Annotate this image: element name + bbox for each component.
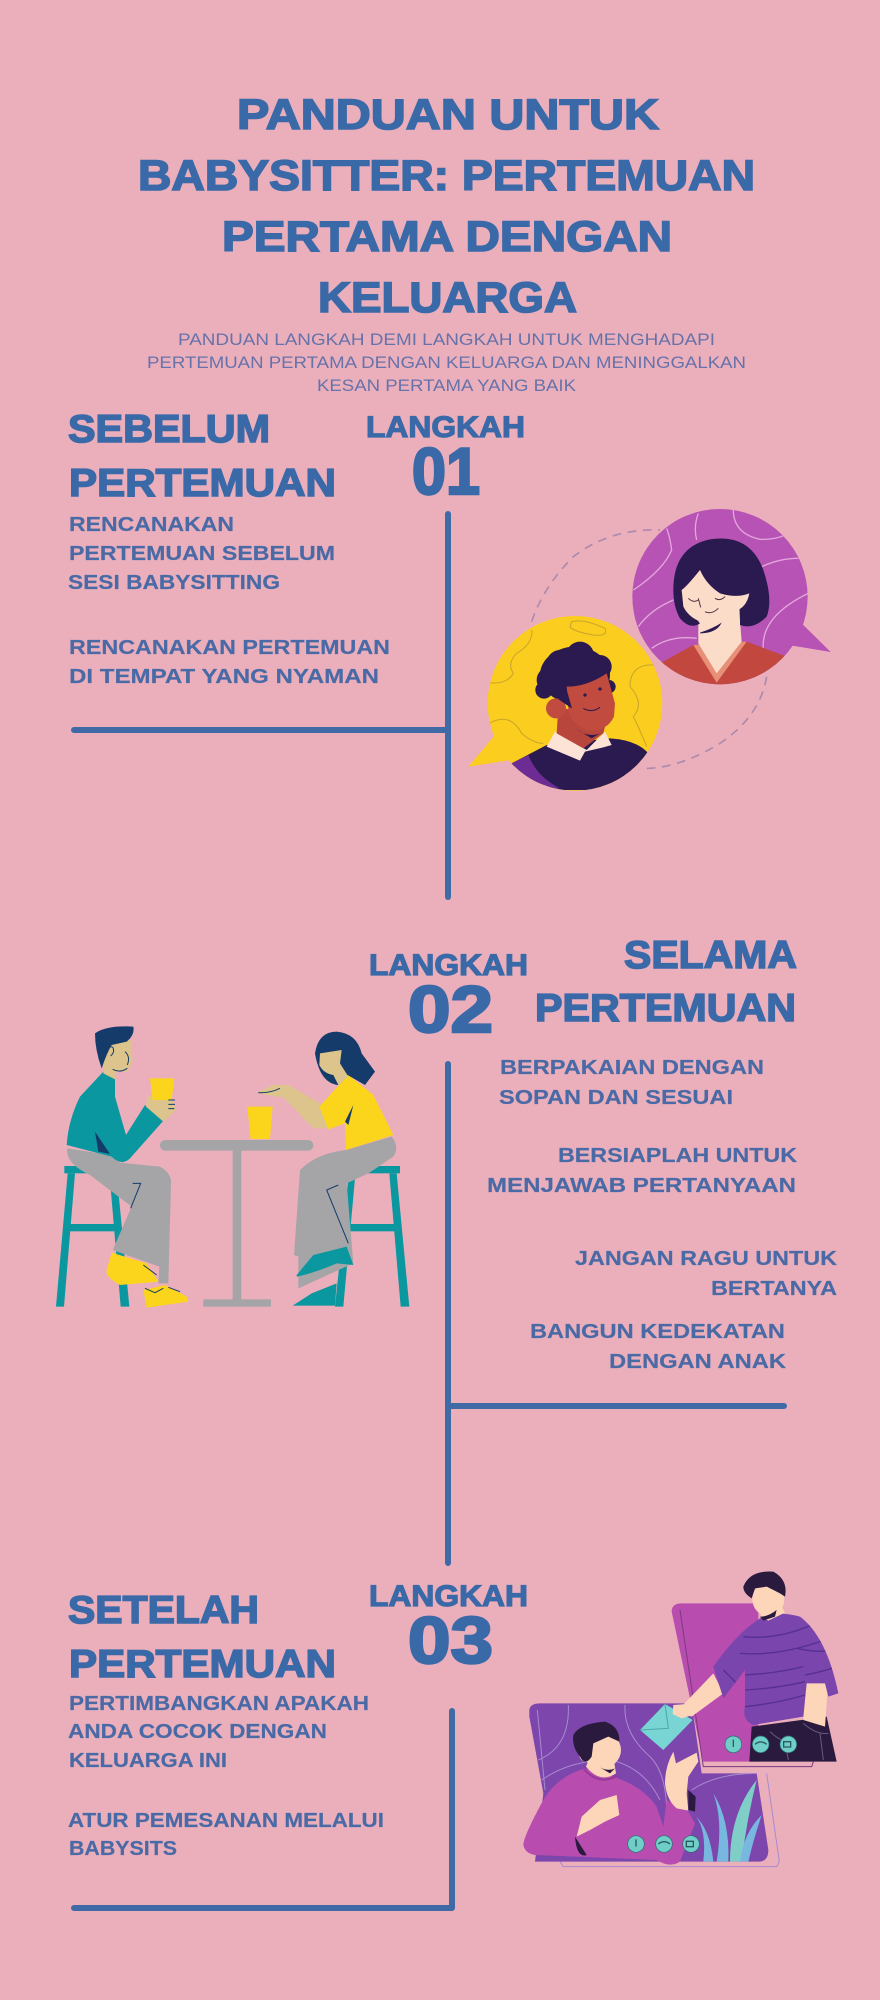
text block: step 2 points: JANGAN RAGU UNTUK — [575, 1247, 837, 1270]
heading: setelah pertemuan: PERTEMUAN — [69, 1643, 336, 1686]
text block: step 2 points: BERTANYA — [711, 1277, 837, 1300]
bottom man in magenta sweater — [523, 1722, 698, 1865]
seated man with cup — [67, 1026, 188, 1308]
illustration: couple talking at a table — [56, 1026, 409, 1308]
call buttons — [628, 1736, 797, 1852]
text block: step 1 points: SESI BABYSITTING — [68, 571, 280, 594]
text block: step 2 points: BERPAKAIAN DENGAN — [500, 1056, 764, 1079]
purple call window — [529, 1703, 768, 1862]
text block: step 3 points — [68, 1692, 384, 1860]
text block: step 3 points: PERTIMBANGKAN APAKAH — [69, 1692, 369, 1715]
heading: sebelum pertemuan: PERTEMUAN — [69, 462, 336, 505]
text block: step 3 points: ATUR PEMESANAN MELALUI — [68, 1809, 384, 1832]
yellow speech bubble with man — [468, 616, 662, 791]
right stool — [335, 1166, 409, 1307]
step label 03 — [369, 1580, 528, 1677]
heading: setelah pertemuan: SETELAH — [68, 1589, 259, 1632]
heading: setelah pertemuan — [68, 1589, 336, 1686]
text block: step 3 points: KELUARGA INI — [69, 1749, 227, 1772]
text block: step 1 points: PERTEMUAN SEBELUM — [69, 542, 335, 565]
envelope — [640, 1704, 693, 1750]
subtitle: PANDUAN LANGKAH DEMI LANGKAH UNTUK MENGHADAPI — [178, 330, 715, 349]
text block: step 2 points: SOPAN DAN SESUAI — [499, 1086, 733, 1109]
step label 03: 03 — [408, 1603, 493, 1677]
title: BABYSITTER: PERTEMUAN — [138, 152, 755, 200]
text block: step 2 points: BERSIAPLAH UNTUK — [558, 1144, 797, 1167]
step label 01 — [366, 411, 525, 508]
text block: step 1 points: DI TEMPAT YANG NYAMAN — [69, 665, 379, 688]
heading: selama pertemuan: PERTEMUAN — [535, 987, 796, 1030]
panel: step 2 during the meeting — [56, 934, 837, 1563]
text block: step 2 points: BANGUN KEDEKATAN — [530, 1320, 785, 1343]
text block: step 1 points — [68, 513, 390, 688]
text block: step 1 points: RENCANAKAN — [69, 513, 234, 536]
text block: step 2 points: DENGAN ANAK — [609, 1350, 786, 1373]
step label 03: LANGKAH — [369, 1580, 528, 1613]
title: KELUARGA — [318, 274, 577, 322]
text block: step 2 points: MENJAWAB PERTANYAAN — [487, 1174, 796, 1197]
left stool — [56, 1166, 129, 1307]
text block: step 3 points: BABYSITS — [69, 1837, 177, 1860]
heading: sebelum pertemuan — [68, 408, 336, 505]
subtitle: KESAN PERTAMA YANG BAIK — [317, 376, 577, 395]
table — [160, 1140, 313, 1307]
title: PERTAMA DENGAN — [222, 213, 672, 261]
subtitle — [147, 330, 746, 395]
purple speech bubble with woman — [632, 509, 831, 690]
text block: step 3 points: ANDA COCOK DENGAN — [68, 1720, 327, 1743]
top man in striped sweater — [677, 1572, 838, 1762]
illustration: video call with envelope — [523, 1572, 838, 1867]
plant — [696, 1780, 762, 1862]
heading: selama pertemuan — [535, 934, 797, 1030]
window outlines — [537, 1705, 779, 1867]
text block: step 2 points — [487, 1056, 837, 1373]
connector line: step 1 — [74, 514, 448, 897]
seated woman — [257, 1032, 396, 1306]
step label 02 — [369, 949, 528, 1046]
step label 02: LANGKAH — [369, 949, 528, 982]
step label 02: 02 — [408, 972, 493, 1046]
connector line: step 2 — [448, 1064, 784, 1563]
illustration: two people in speech bubbles — [468, 509, 831, 791]
panel: step 3 after the meeting — [68, 1572, 838, 1908]
subtitle: PERTEMUAN PERTAMA DENGAN KELUARGA DAN MENINGGALKAN — [147, 353, 746, 372]
heading: selama pertemuan: SELAMA — [624, 934, 797, 977]
panel: step 1 before the meeting — [68, 408, 831, 897]
title — [138, 91, 755, 322]
cup on table — [247, 1107, 273, 1139]
heading: sebelum pertemuan: SEBELUM — [68, 408, 270, 451]
connector line: step 3 — [74, 1711, 452, 1908]
text block: step 1 points: RENCANAKAN PERTEMUAN — [69, 636, 390, 659]
step label 01: 01 — [412, 434, 480, 508]
step label 01: LANGKAH — [366, 411, 525, 444]
title: PANDUAN UNTUK — [237, 91, 659, 139]
magenta call window — [672, 1603, 758, 1762]
